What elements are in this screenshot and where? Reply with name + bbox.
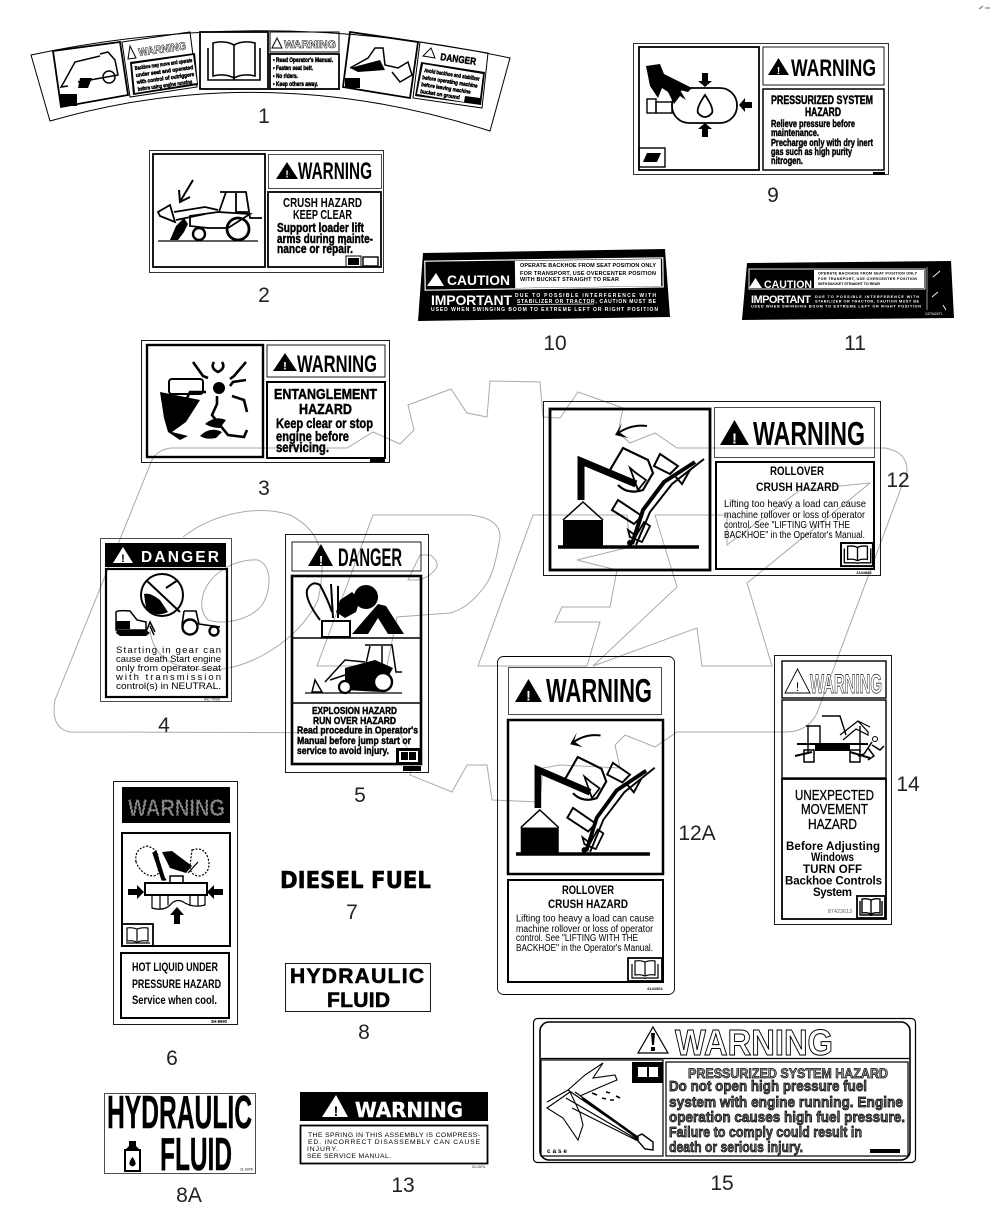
picture: rollover — [508, 720, 663, 874]
hazard text: PRESSURIZED SYSTEM HAZARD — [688, 1065, 888, 1081]
decal 15: pressurized system hazard wide — [534, 1018, 916, 1162]
danger header: DANGER — [338, 544, 402, 572]
picture: rollover — [550, 409, 710, 570]
warning header — [763, 47, 884, 85]
caution block: WITH BUCKET STRAIGHT TO REAR — [520, 277, 619, 283]
decal 11: caution important small — [742, 261, 954, 320]
icon: oil container — [125, 1141, 140, 1171]
hazard text — [268, 192, 381, 267]
hazard text: Read procedure in Operator's — [297, 724, 418, 736]
hazard text: Before Adjusting — [786, 841, 880, 853]
warning header outlined: WARNING — [675, 1022, 833, 1063]
hazard text: HAZARD — [299, 401, 352, 418]
hazard text: Precharge only with dry inert — [771, 138, 873, 149]
hazard text: HAZARD — [808, 817, 857, 833]
warning header: ! — [732, 430, 737, 448]
label 12: 12 — [886, 469, 910, 492]
decal 8A: hydraulic fluid large: FLUID — [160, 1128, 232, 1180]
hazard text — [508, 880, 663, 991]
caution block: CAUTION — [764, 279, 812, 291]
panel: backhoe picture — [53, 42, 128, 107]
danger header: ! — [121, 553, 125, 565]
picture and warning text: with transmission — [115, 672, 221, 683]
hazard text: ROLLOVER — [770, 464, 824, 478]
spring text: THE SPRING IN THIS ASSEMBLY IS COMPRESS- — [308, 1132, 480, 1139]
decal 12A: rollover crush hazard vertical — [498, 656, 674, 994]
caution block — [425, 258, 663, 290]
panel: open book — [200, 32, 268, 89]
hazard text: System — [813, 887, 852, 899]
spring text — [300, 1126, 488, 1169]
label 8: 8 — [358, 1021, 370, 1044]
hazard text: Keep clear or stop — [276, 415, 373, 431]
caution block: OPERATE BACKHOE FROM SEAT POSITION ONLY — [818, 272, 917, 276]
decal 3: entanglement hazard — [142, 340, 390, 462]
danger header — [105, 543, 226, 567]
danger header — [292, 542, 421, 572]
label 6: 6 — [166, 1047, 178, 1070]
warning header: WARNING — [753, 415, 865, 452]
label 2: 2 — [258, 284, 270, 307]
decal 10: caution important black — [418, 249, 670, 321]
warning header — [300, 1092, 488, 1122]
hazard text: ENTANGLEMENT — [274, 386, 377, 403]
hazard text: machine rollover or loss of operator — [724, 509, 865, 521]
hazard text: Failure to comply could result in — [669, 1124, 862, 1141]
spring text: SEE SERVICE MANUAL. — [307, 1153, 391, 1160]
picture: hot liquid spray — [122, 833, 230, 946]
decal 4: danger starting in gear — [100, 538, 232, 702]
warning header: ! — [285, 170, 289, 180]
icon: book — [857, 896, 885, 918]
danger header: ! — [319, 553, 323, 568]
hazard text: Windows — [811, 852, 854, 864]
hazard text: HOT LIQUID UNDER — [132, 960, 218, 974]
label 10: 10 — [543, 332, 567, 355]
hazard text — [763, 89, 885, 175]
warning header: WARNING — [297, 351, 377, 378]
panel: warning with bullet list: • Fasten seat belt. — [273, 66, 313, 72]
label 7: 7 — [346, 901, 358, 924]
warning header outlined — [782, 661, 886, 699]
panel: warning text left — [122, 32, 198, 97]
corner mark — [979, 6, 990, 9]
label 12A: 12A — [678, 822, 716, 845]
panel: warning with bullet list: WARNING — [284, 39, 336, 51]
panel: warning text left: WARNING — [138, 40, 187, 59]
hazard text: servicing. — [276, 439, 329, 455]
panels: explosion picture — [292, 576, 421, 764]
hazard text: system with engine running. Engine — [669, 1094, 903, 1111]
warning header outlined: ! — [796, 680, 799, 694]
picture and warning text: control(s) in NEUTRAL. — [116, 681, 221, 692]
icon: book — [841, 543, 873, 566]
caution block: OPERATE BACKHOE FROM SEAT POSITION ONLY — [520, 263, 656, 269]
hazard text: HAZARD — [805, 107, 841, 119]
important block: IMPORTANT — [751, 294, 811, 306]
caution block — [749, 269, 925, 291]
hazard text: service to avoid injury. — [297, 745, 389, 757]
hazard text: CRUSH HAZARD — [756, 480, 839, 494]
hazard text: maintenance. — [771, 128, 819, 139]
hazard text: KEEP CLEAR — [293, 208, 352, 222]
panel: danger text: bucket on ground — [420, 89, 460, 101]
warning header: ! — [777, 66, 780, 77]
important block: STABILIZER OR TRACTOR, CAUTION MUST BE — [517, 299, 657, 305]
panel: loader picture — [343, 32, 418, 98]
decal 7: diesel fuel: DIESEL FUEL — [280, 868, 431, 894]
important block: IMPORTANT — [431, 292, 512, 308]
hazard text: nance or repair. — [277, 242, 353, 256]
warning header — [267, 345, 385, 378]
warning header: ! — [334, 1103, 338, 1119]
picture: entanglement — [147, 345, 263, 457]
hazard text: Relieve pressure before — [771, 119, 855, 130]
warning header — [714, 408, 874, 458]
label 13: 13 — [391, 1174, 415, 1197]
warning header: WARNING — [298, 158, 372, 185]
hazard text: CRUSH HAZARD — [548, 897, 628, 911]
important block: DUE TO POSSIBLE INTERFERENCE WITH — [515, 293, 656, 299]
decal 1: curved four-panel label — [31, 31, 510, 131]
hazard text: 4144304 — [647, 986, 663, 991]
hazard text: arms during mainte- — [277, 232, 373, 246]
caution block: WITH BUCKET STRAIGHT TO REAR — [818, 282, 880, 286]
side panel marks — [925, 267, 946, 316]
decal 12: rollover crush hazard — [544, 402, 880, 576]
picture: hand and injection — [541, 1060, 663, 1156]
hazard text: MOVEMENT — [801, 802, 868, 818]
hazard text: gas such as high purity — [771, 147, 852, 158]
spring text: INJURY. — [307, 1146, 338, 1153]
decal 8A: hydraulic fluid large — [104, 1086, 256, 1180]
panel: danger text: before leaving machine — [421, 82, 471, 96]
panel: warning text left: with control of outriggers — [136, 72, 195, 86]
hazard text — [666, 1062, 908, 1156]
garbled black header: WARNING — [128, 795, 225, 822]
picture: hand and injection: case — [547, 1148, 567, 1155]
panel: warning with bullet list: • Read Operator's Manual. — [273, 58, 333, 64]
hazard text: J344884 — [856, 570, 872, 575]
hazard text — [121, 953, 229, 1024]
warning header outlined: WARNING — [810, 669, 882, 699]
panel: warning text left: under seat and operated — [135, 65, 194, 79]
hazard text: 3H-8990 — [211, 1019, 227, 1024]
side panel marks: 1379424T1 — [925, 312, 943, 316]
decal 8: hydraulic fluid: HYDRAULIC — [290, 965, 424, 988]
hazard text: EXPLOSION HAZARD — [312, 705, 397, 717]
hazard text: ROLLOVER — [562, 883, 614, 897]
hazard text: BACKHOE" in the Operator's Manual. — [516, 943, 653, 954]
decal 5: explosion and run over — [286, 534, 428, 772]
decal 8: hydraulic fluid: FLUID — [327, 989, 390, 1012]
hazard text: 87423613 — [828, 909, 852, 915]
caution block: FOR TRANSPORT, USE OVERCENTER POSITION — [520, 271, 656, 277]
picture: machine and running person — [782, 700, 886, 778]
warning header: WARNING — [546, 672, 652, 709]
panel: danger text — [413, 42, 488, 108]
decal 13: spring warning — [300, 1092, 488, 1169]
picture and warning text: only from operator seat — [116, 663, 221, 674]
decal 14: unexpected movement — [774, 656, 892, 924]
picture and warning text: AC-7095 — [204, 696, 221, 702]
panel: warning text left: before using engine running — [137, 79, 193, 93]
watermark logo outline — [54, 381, 907, 802]
warning header: WARNING — [355, 1098, 463, 1122]
hazard text — [716, 462, 874, 575]
hazard text: control. See "LIFTING WITH THE — [724, 519, 850, 531]
label 11: 11 — [844, 332, 866, 355]
hazard text: PRESSURE HAZARD — [132, 977, 221, 991]
hazard text: operation causes high fuel pressure. — [669, 1109, 905, 1126]
panel: danger text: before operating machine — [422, 75, 478, 90]
caution block: FOR TRANSPORT, USE OVERCENTER POSITION — [818, 277, 917, 281]
hazard text: Lifting too heavy a load can cause — [724, 498, 866, 510]
panel: warning with bullet list: • Keep others away. — [273, 82, 318, 88]
warning header — [268, 154, 382, 188]
spring text: 21-1974 — [472, 1165, 485, 1169]
hazard text: CRUSH HAZARD — [283, 196, 362, 210]
important block: DUE TO POSSIBLE INTERFERENCE WITH — [815, 295, 919, 299]
label 3: 3 — [258, 477, 270, 500]
decal 2: crush hazard — [150, 150, 384, 272]
important block: STABILIZER OR TRACTOR, CAUTION MUST BE — [815, 300, 919, 304]
label 4: 4 — [158, 714, 170, 737]
picture and warning text — [106, 569, 227, 702]
hazard text — [267, 382, 385, 462]
panel: warning with bullet list: • No riders. — [273, 74, 298, 80]
warning header — [508, 668, 662, 714]
picture: loader crush — [153, 154, 265, 267]
hazard text: Service when cool. — [132, 993, 217, 1007]
hazard text — [782, 779, 886, 919]
hazard text — [297, 705, 421, 771]
label 9: 9 — [767, 184, 779, 207]
hazard text: control. See "LIFTING WITH THE — [516, 933, 638, 944]
hazard text: RUN OVER HAZARD — [313, 715, 396, 727]
garbled black header — [122, 787, 230, 823]
panel: danger text: Avoid backhoe and stabilizer — [424, 68, 481, 83]
icon: book — [628, 958, 662, 981]
hazard text: death or serious injury. — [669, 1139, 803, 1156]
hazard text: Backhoe Controls — [785, 876, 882, 888]
danger header: DANGER — [141, 549, 219, 566]
decal 1 outline — [31, 31, 510, 131]
hazard text: machine rollover or loss of operator — [516, 924, 654, 935]
hazard text: Do not open high pressure fuel — [669, 1078, 867, 1095]
decal 8A: hydraulic fluid large: 11-4378 — [240, 1168, 253, 1172]
warning header: ! — [526, 688, 531, 704]
hazard text: Manual before jump start or — [297, 735, 411, 747]
panel: warning with bullet list — [270, 32, 339, 89]
important block: USED WHEN SWINGING BOOM TO EXTREME LEFT OR RIGHT POSITION — [431, 307, 658, 313]
panel: warning text left: Backhoe may move and operate — [134, 58, 193, 72]
hazard text: nitrogen. — [771, 156, 803, 167]
important block: USED WHEN SWINGING BOOM TO EXTREME LEFT OR RIGHT POSITION — [751, 304, 921, 308]
caution block: CAUTION — [447, 272, 510, 288]
hazard text: UNEXPECTED — [795, 788, 874, 804]
label 14: 14 — [896, 773, 920, 796]
hazard text: BACKHOE" in the Operator's Manual. — [724, 529, 865, 541]
picture: accumulator — [639, 47, 759, 170]
hazard text: Lifting too heavy a load can cause — [516, 914, 654, 924]
panel: danger text: DANGER — [440, 52, 477, 68]
hazard text: PRESSURIZED SYSTEM — [771, 95, 873, 107]
decal 6: hot liquid under pressure — [114, 782, 238, 1024]
label 8A: 8A — [176, 1184, 202, 1207]
label 5: 5 — [354, 784, 366, 807]
label 15: 15 — [710, 1172, 734, 1195]
picture and warning text: cause death Start engine — [116, 654, 221, 665]
spring text: ED. INCORRECT DISASSEMBLY CAN CAUSE — [308, 1139, 480, 1146]
decal 9: pressurized system — [634, 44, 888, 175]
hazard text: TURN OFF — [803, 864, 862, 876]
hazard text: Support loader lift — [277, 221, 365, 235]
label 1: 1 — [258, 105, 270, 128]
hazard text: engine before — [276, 428, 349, 444]
decal 8A: hydraulic fluid large: HYDRAULIC — [107, 1086, 252, 1138]
warning header: WARNING — [791, 55, 876, 82]
warning header: ! — [283, 360, 287, 372]
picture and warning text: Starting in gear can — [116, 645, 221, 656]
important block — [431, 292, 658, 313]
important block — [751, 294, 921, 308]
decal 8: hydraulic fluid — [286, 964, 430, 1012]
